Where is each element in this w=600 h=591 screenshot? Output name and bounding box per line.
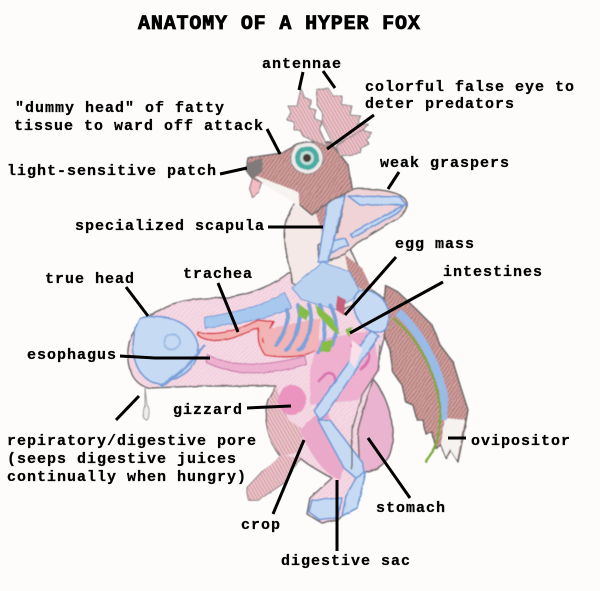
head	[246, 142, 352, 216]
title: ANATOMY OF A HYPER FOX	[138, 13, 421, 36]
fur patches	[310, 195, 352, 248]
label: intestines: intestines	[443, 264, 543, 281]
label: light-sensitive patch: light-sensitive patch	[7, 163, 217, 180]
hip and hind leg skeleton	[309, 290, 389, 520]
antennae ears	[287, 88, 372, 156]
neck and torso	[285, 190, 376, 310]
esophagus	[206, 355, 306, 373]
label: esophagus: esophagus	[27, 347, 117, 364]
leader lines	[116, 71, 466, 551]
label: egg mass: egg mass	[395, 236, 475, 253]
digestive drip	[143, 388, 149, 420]
false eye	[291, 142, 323, 174]
specialized scapula	[318, 196, 345, 262]
egg mass	[298, 296, 352, 352]
tongue	[249, 178, 262, 197]
label: true head: true head	[45, 271, 135, 288]
gizzard	[278, 385, 306, 415]
true head	[133, 316, 205, 386]
label: specialized scapula: specialized scapula	[75, 218, 265, 235]
spine and ribs	[205, 262, 360, 352]
label: colorful false eye: colorful false eye to	[365, 79, 575, 96]
label: gizzard: gizzard	[173, 402, 243, 419]
label: ovipositor: ovipositor	[471, 433, 571, 450]
label: respiratory/digestive pore: continually when hungry)	[7, 469, 247, 486]
label: respiratory/digestive pore: repiratory/digestive pore	[7, 433, 257, 450]
crop and digestive sac	[267, 386, 345, 480]
label: weak graspers: weak graspers	[380, 155, 510, 172]
label: respiratory/digestive pore: (seeps digestive juices	[7, 451, 237, 468]
hind leg fur	[247, 455, 300, 500]
intestines	[310, 330, 380, 405]
weak grasper arm	[318, 189, 407, 260]
label: dummy head: "dummy head" of fatty	[15, 100, 225, 117]
illustration: hyper fox cutaway	[128, 88, 468, 523]
main torso and lower legs	[128, 270, 385, 523]
trachea	[198, 320, 315, 357]
stomach	[352, 378, 393, 473]
light-sensitive nose patch	[247, 158, 263, 178]
body cavity red	[262, 318, 320, 355]
label: digestive sac: digestive sac	[281, 553, 411, 570]
label: crop: crop	[241, 517, 281, 534]
label: dummy head: tissue to ward off attack	[14, 118, 264, 135]
label: antennae: antennae	[262, 56, 342, 73]
stomach boundary	[352, 345, 380, 470]
label: stomach: stomach	[376, 500, 446, 517]
tail	[382, 285, 468, 462]
label: colorful false eye: deter predators	[365, 96, 515, 113]
label: trachea: trachea	[183, 266, 253, 283]
